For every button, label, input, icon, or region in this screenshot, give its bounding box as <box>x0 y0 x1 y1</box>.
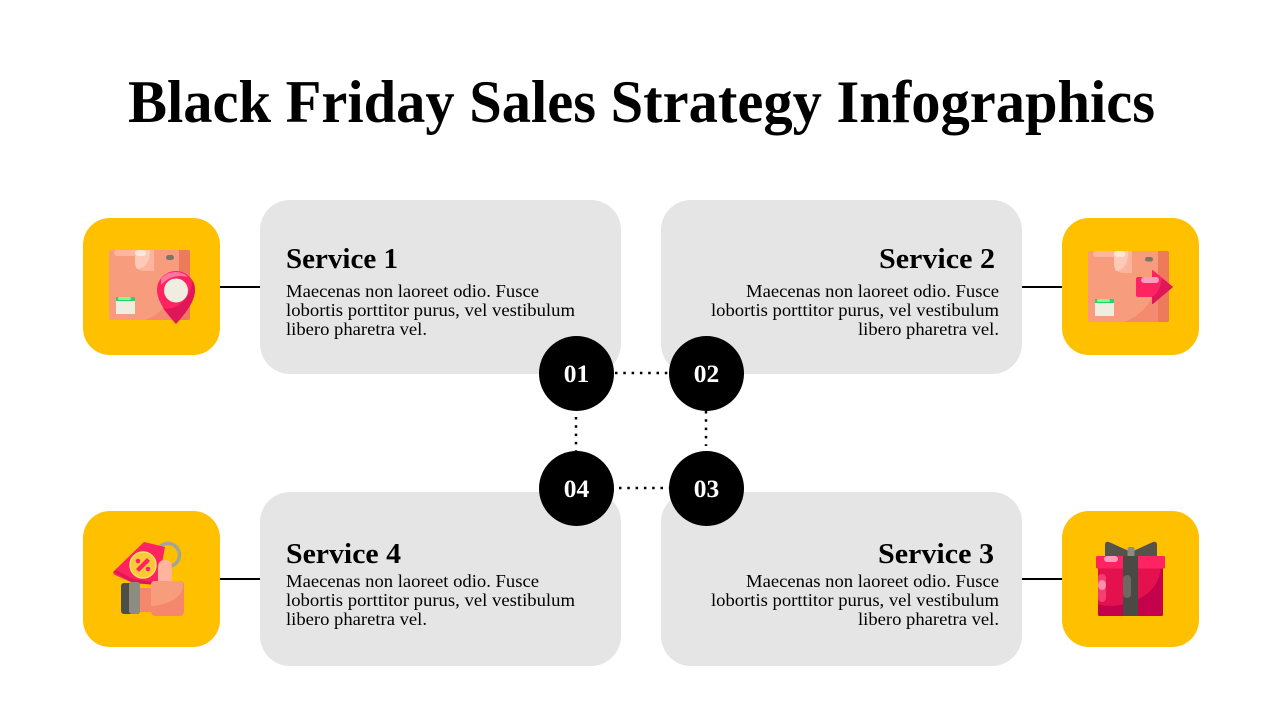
text: service 2 body: libero pharetra vel. <box>858 319 999 339</box>
badge 01: 01 <box>564 359 589 388</box>
bow <box>1105 542 1157 557</box>
icon: gift box <box>1062 511 1199 647</box>
heading: service 3: Service 3 <box>878 538 994 570</box>
pin <box>157 271 195 324</box>
text: service 2 body: Maecenas non laoreet odio. Fusce <box>746 281 999 301</box>
icon: parcel with location pin <box>83 218 220 355</box>
text: service 3 body: lobortis porttitor purus, vel vestibulum <box>711 590 999 610</box>
panel: service 2 <box>661 200 1022 374</box>
text: service 2 body: lobortis porttitor purus, vel vestibulum <box>711 300 999 320</box>
badge 03: 03 <box>694 474 719 503</box>
badge 04 <box>539 451 614 526</box>
text: service 4 body: libero pharetra vel. <box>286 609 427 629</box>
dotted connector 04-03 <box>619 487 670 489</box>
heading: service 4: Service 4 <box>286 538 401 570</box>
heading: service 1: Service 1 <box>286 243 398 275</box>
text: service 1 body: libero pharetra vel. <box>286 319 427 339</box>
panel: service 4 <box>260 492 621 666</box>
badge 02 <box>669 336 744 411</box>
text: service 3 body <box>711 571 999 629</box>
lid <box>1096 556 1165 568</box>
connector: service 4 <box>220 578 260 580</box>
heading: service 2: Service 2 <box>879 243 995 275</box>
text: service 4 body: lobortis porttitor purus, vel vestibulum <box>286 590 575 610</box>
badge 01 <box>539 336 614 411</box>
badge 03 <box>669 451 744 526</box>
text: service 4 body <box>286 571 575 629</box>
badge 02: 02 <box>694 359 719 388</box>
text: service 2 body <box>711 281 999 339</box>
dotted connector 01-02 <box>615 372 668 374</box>
ring <box>156 544 180 566</box>
box body <box>1098 566 1163 616</box>
connector: service 2 <box>1022 286 1062 288</box>
panel: service 1 <box>260 200 621 374</box>
text: service 3 body: libero pharetra vel. <box>858 609 999 629</box>
icon: price tag and thumbs up <box>83 511 220 647</box>
title: Black Friday Sales Strategy Infographics <box>128 69 1155 135</box>
text: service 1 body: lobortis porttitor purus, vel vestibulum <box>286 300 575 320</box>
icon: parcel with arrow <box>1062 218 1199 355</box>
text: service 1 body <box>286 281 575 339</box>
panel: service 3 <box>661 492 1022 666</box>
badge 04: 04 <box>564 474 590 503</box>
dotted connector 02-03 <box>705 411 707 446</box>
text: service 3 body: Maecenas non laoreet odio. Fusce <box>746 571 999 591</box>
text: service 4 body: Maecenas non laoreet odio. Fusce <box>286 571 539 591</box>
connector: service 3 <box>1022 578 1062 580</box>
ribbon <box>1123 556 1138 616</box>
thumb and hand <box>158 560 172 584</box>
text: service 1 body: Maecenas non laoreet odio. Fusce <box>286 281 539 301</box>
arrow <box>1136 270 1173 304</box>
dotted connector 01-04 <box>575 417 577 451</box>
tag <box>113 542 165 585</box>
connector: service 1 <box>220 286 260 288</box>
